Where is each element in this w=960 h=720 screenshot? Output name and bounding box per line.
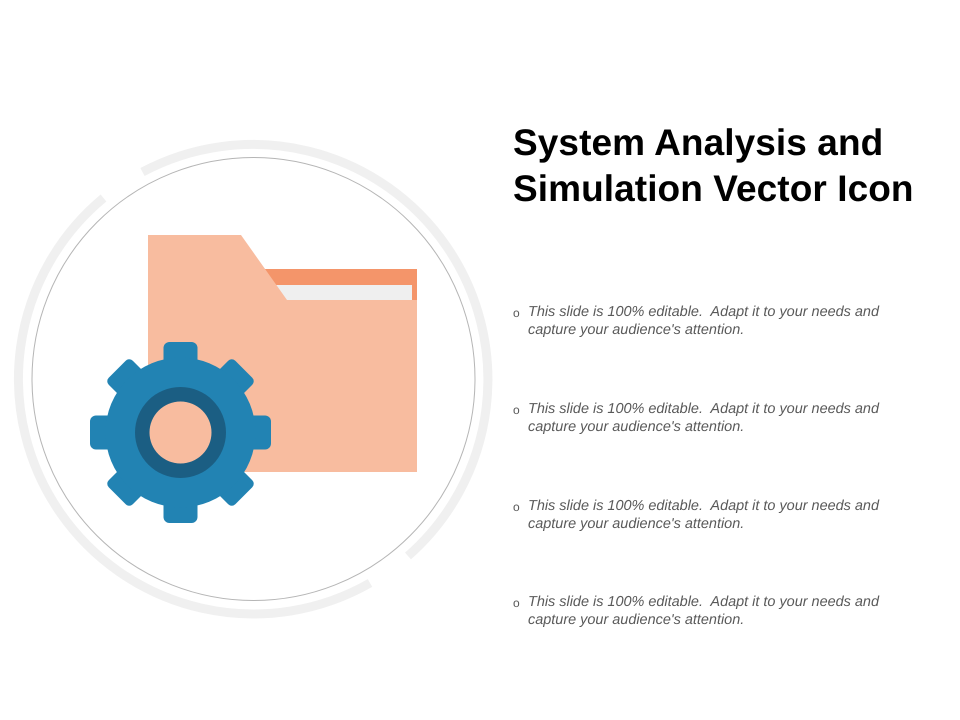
bullet text 2: This slide is 100% editable. Adapt it to your needs and capture your audience's attention. (528, 401, 879, 435)
inner thin circle (32, 158, 475, 600)
bullet text 4: This slide is 100% editable. Adapt it to your needs and capture your audience's attention. (528, 594, 879, 628)
icon: gear (90, 342, 271, 523)
folder front (148, 235, 417, 472)
title (513, 122, 914, 209)
outer ring segments (18, 144, 488, 614)
gear dark ring (135, 387, 226, 478)
gear hole (150, 402, 212, 464)
bullet text 1: This slide is 100% editable. Adapt it to your needs and capture your audience's attention. (528, 304, 879, 338)
paper sheet (272, 285, 412, 301)
illustration: folder and gear in rings (14, 140, 492, 618)
icon: folder (148, 235, 417, 472)
folder back tab (262, 269, 417, 302)
gear teeth (90, 342, 271, 523)
gear body (106, 358, 256, 508)
bullet text 1: o (513, 306, 520, 320)
title: System Analysis and (513, 122, 883, 163)
bullet text 3: This slide is 100% editable. Adapt it to your needs and capture your audience's attention. (528, 498, 879, 532)
bullet text 2: o (513, 403, 520, 417)
bullet text 4: o (513, 596, 520, 610)
title: Simulation Vector Icon (513, 168, 914, 209)
bullet text 3: o (513, 500, 520, 514)
